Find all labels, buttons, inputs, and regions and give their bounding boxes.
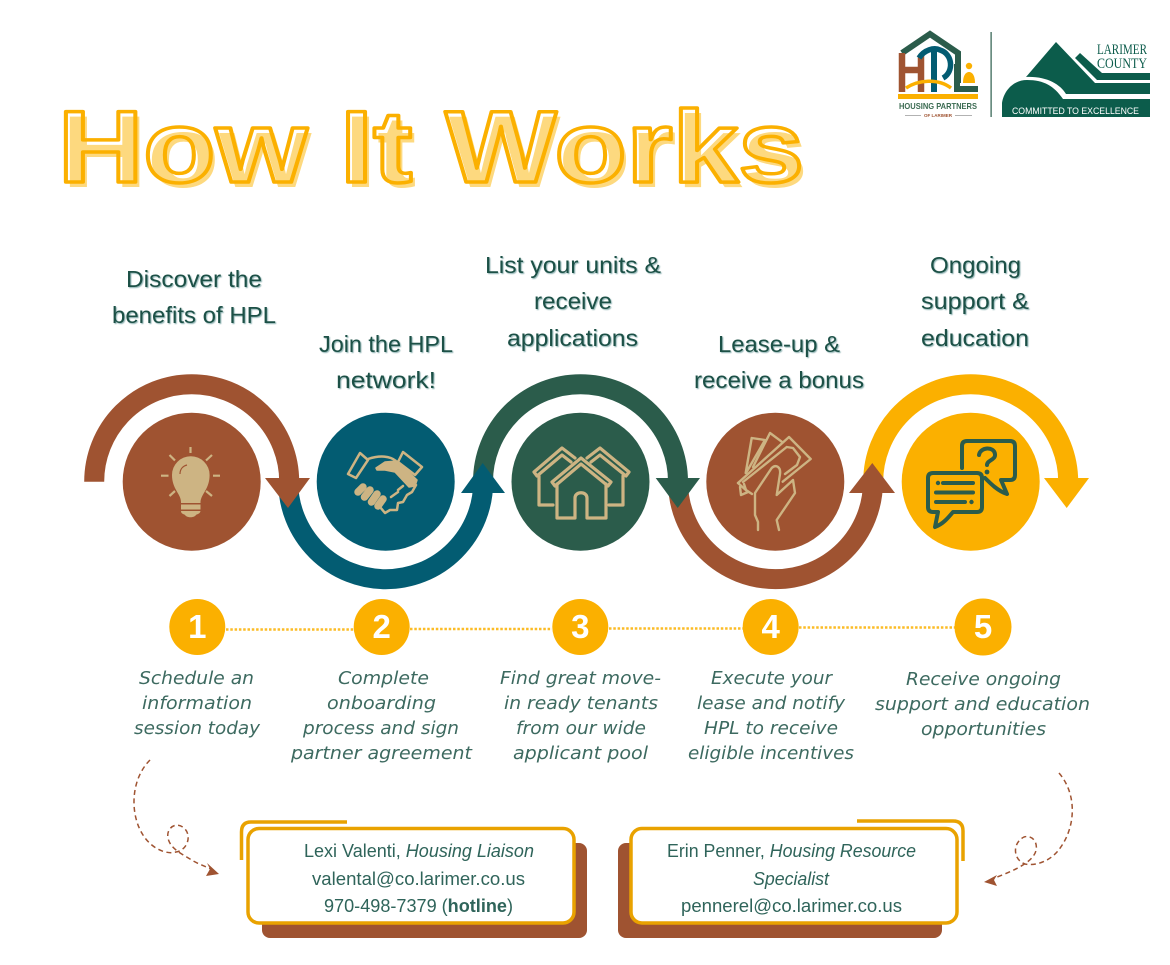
step 3 circle with houses icon	[512, 413, 650, 551]
step headings: List your units &	[485, 252, 661, 278]
title: How It Works	[58, 90, 804, 204]
contact card: Erin Penner: Erin Penner, Housing Resource	[667, 840, 916, 861]
number badge 1	[169, 599, 225, 655]
step 3 description: applicant pool	[513, 743, 648, 764]
arc 1 brown	[94, 384, 310, 508]
number badge 2	[354, 599, 410, 655]
step headings: receive	[534, 288, 612, 314]
step headings: Discover the	[126, 266, 262, 292]
number badge 2: 2	[373, 608, 391, 645]
step 1 description: information	[142, 693, 252, 714]
step 3 description: Find great move-	[500, 668, 661, 689]
logo: Larimer County: COMMITTED TO EXCELLENCE	[1012, 106, 1139, 117]
logo: Housing Partners of Larimer: HOUSING PARTNERS	[899, 101, 977, 111]
step headings	[112, 252, 1029, 393]
contact card: Erin Penner	[618, 821, 963, 938]
contact card: Erin Penner: Specialist	[753, 868, 830, 889]
title: How It Works	[62, 95, 808, 209]
arc 3 green	[483, 384, 700, 508]
step headings: benefits of HPL	[112, 302, 276, 328]
step 4 description: lease and notify	[697, 693, 845, 714]
logo divider	[990, 32, 992, 117]
contact card: Lexi Valenti: valental@co.larimer.co.us	[312, 868, 525, 889]
step 1 circle with lightbulb icon	[123, 413, 261, 551]
step headings: applications	[507, 325, 638, 351]
number badge 3	[552, 599, 608, 655]
step headings: network!	[336, 367, 436, 393]
dashed arrow right	[984, 773, 1072, 886]
number badge 4: 4	[762, 608, 781, 645]
contact card: Lexi Valenti	[242, 822, 587, 938]
step 4 description: Execute your	[711, 668, 834, 689]
number badge 5	[954, 598, 1012, 656]
step 5 description: Receive ongoing	[906, 669, 1061, 690]
dashed arrow left	[134, 760, 219, 876]
number badge 5: 5	[974, 608, 992, 645]
step 2 circle with handshake icon	[317, 413, 455, 551]
step headings: Join the HPL	[319, 331, 453, 357]
step 3 description: in ready tenants	[504, 693, 658, 714]
step headings: receive a bonus	[694, 367, 864, 393]
step 5 description	[875, 669, 1090, 740]
logo: Housing Partners of Larimer	[898, 34, 978, 118]
logo: Larimer County: COUNTY	[1097, 56, 1147, 72]
logo: Larimer County: LARIMER	[1097, 42, 1147, 58]
step 2 description: process and sign	[302, 718, 459, 739]
step 3 description: from our wide	[516, 718, 646, 739]
step 5 circle with chat bubbles icon	[902, 413, 1040, 551]
step headings: education	[921, 325, 1029, 351]
logo: Housing Partners of Larimer: OF LARIMER	[924, 113, 953, 118]
step 4 circle with money in hand icon	[706, 413, 844, 551]
step 4 description: HPL to receive	[704, 718, 838, 739]
arrow ribbon	[94, 384, 1089, 579]
step headings: Lease-up &	[718, 331, 840, 357]
step 2 description	[290, 668, 473, 764]
step 4 description	[688, 668, 854, 764]
step headings: Ongoing	[930, 252, 1021, 278]
step 3 description	[500, 668, 661, 764]
step 1 description: session today	[134, 718, 260, 739]
step headings: support &	[921, 288, 1029, 314]
arc 4 brown	[678, 463, 895, 579]
title: How It Works	[58, 90, 804, 204]
step 5 description: support and education	[875, 694, 1090, 715]
contact card: Lexi Valenti: Lexi Valenti, Housing Liaison	[304, 840, 534, 861]
step 2 description: Complete	[338, 668, 429, 689]
step 2 description: partner agreement	[290, 743, 473, 764]
step 5 description: opportunities	[921, 719, 1046, 740]
contact card: Erin Penner: pennerel@co.larimer.co.us	[681, 895, 902, 916]
number badge 4	[743, 599, 799, 655]
number badge 1: 1	[188, 608, 206, 645]
step 1 description: Schedule an	[139, 668, 254, 689]
number badge 3: 3	[571, 608, 589, 645]
contact card: Lexi Valenti: 970-498-7379 (hotline)	[324, 895, 513, 916]
arc 2 teal	[288, 463, 505, 579]
arc 5 yellow	[873, 384, 1089, 508]
logo: Larimer County	[1002, 42, 1150, 117]
step 2 description: onboarding	[327, 693, 436, 714]
step 4 description: eligible incentives	[688, 743, 854, 764]
dotted connector	[226, 628, 955, 630]
step 1 description	[134, 668, 260, 739]
